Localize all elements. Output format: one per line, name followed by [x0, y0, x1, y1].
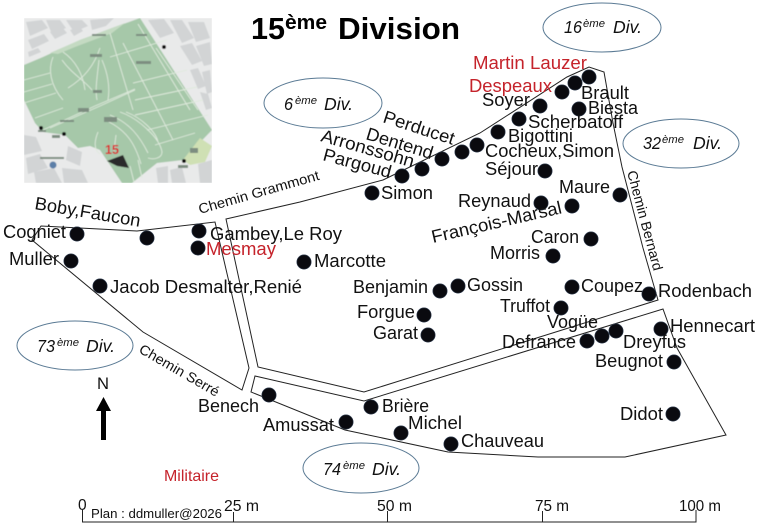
grave names: Muller [9, 249, 59, 269]
neighbouring division: 32 [623, 119, 739, 168]
neighbouring division: 32: ème [662, 134, 684, 146]
neighbouring division: 74: ème [343, 460, 365, 472]
neighbouring division: 74: Div. [372, 459, 401, 479]
grave names: Bigottini [508, 126, 573, 146]
title: Division [338, 11, 460, 46]
grave names: Brault [581, 83, 629, 103]
title: ème [285, 12, 327, 34]
north arrow [96, 374, 111, 440]
grave names: Gambey,Le Roy [210, 224, 342, 244]
path labels: Chemin Grammont [196, 167, 321, 217]
grave names: Benech [198, 396, 259, 416]
neighbouring division: 74: 74 [323, 459, 341, 479]
credit: Plan : ddmuller@2026 [91, 506, 222, 521]
path labels: Chemin Bernard [624, 169, 666, 272]
inset location map [24, 18, 212, 183]
neighbouring division: 6: ème [295, 95, 317, 107]
grave names: Jacob Desmalter,Renié [110, 277, 302, 297]
title: 15 [251, 11, 285, 46]
grave names: Martin Lauzer [473, 53, 587, 73]
grave names: Coupez [581, 276, 643, 296]
neighbouring division: 73: ème [57, 337, 79, 349]
grave names: Rodenbach [658, 281, 752, 301]
scale bar [78, 497, 721, 522]
grave names: Reynaud [458, 191, 531, 211]
neighbouring division: 16: 16 [564, 17, 582, 37]
grave names: Scherbatoff [528, 112, 624, 132]
scale bar: 50 m [377, 498, 412, 515]
grave names: François-Marsal [429, 197, 563, 247]
neighbouring division: 16 [543, 3, 661, 52]
grave markers [64, 70, 681, 451]
plot outlines of the division [32, 67, 726, 457]
grave names: Truffot [500, 296, 550, 316]
grave names: Soyer [482, 90, 530, 110]
grave names: Dentend [364, 124, 436, 163]
path labels: Chemin Serré [136, 341, 223, 400]
neighbouring division: 74 [303, 443, 419, 493]
grave names: Hennecart [670, 316, 755, 336]
grave names: Didot [620, 404, 663, 424]
scale bar: 75 m [535, 498, 569, 515]
grave names: Amussat [263, 415, 334, 435]
neighbouring division: 6 [264, 78, 382, 128]
neighbouring division: 6: 6 [284, 94, 293, 114]
scale bar: 0 [78, 497, 87, 514]
neighbouring division: 73: Div. [86, 336, 115, 356]
grave names: Morris [490, 243, 540, 263]
grave names: Boby,Faucon [33, 193, 142, 231]
grave names: Caron [531, 227, 579, 247]
neighbouring division: 16: ème [583, 18, 605, 30]
military note: Militaire [164, 468, 219, 485]
neighbouring division: 16: Div. [613, 17, 642, 37]
neighbouring division: 32: 32 [643, 133, 661, 153]
grave names: Beugnot [595, 351, 663, 371]
grave names: Maure [559, 177, 610, 197]
neighbouring division: 73 [17, 321, 133, 370]
grave names: Perducet [381, 107, 457, 149]
grave names: Pargoud [321, 145, 394, 182]
grave names: Cogniet [3, 222, 66, 242]
grave names: Chauveau [461, 431, 544, 451]
neighbouring division: 32: Div. [693, 133, 722, 153]
grave names: Simon [381, 183, 433, 203]
grave names: Biesta [588, 98, 639, 118]
grave names: Mesmay [206, 239, 276, 259]
grave names: Vogüe [547, 312, 598, 332]
grave names: Defrance [502, 332, 576, 352]
title [251, 11, 460, 46]
grave names: Garat [373, 323, 418, 343]
grave names: Forgue [357, 302, 415, 322]
grave names: Brière [382, 396, 429, 416]
north arrow: N [97, 374, 109, 393]
neighbouring division: 73: 73 [37, 336, 55, 356]
grave names: Cocheux,Simon [485, 141, 614, 161]
grave names: Séjour [485, 159, 538, 179]
grave names: Benjamin [353, 277, 428, 297]
grave names: Gossin [467, 275, 523, 295]
grave names: Arronssohn [319, 126, 417, 171]
grave names: Michel [408, 413, 462, 433]
scale bar: 25 m [224, 498, 259, 515]
path labels [136, 167, 666, 400]
grave names: Despeaux [469, 76, 552, 96]
grave names: Marcotte [314, 251, 386, 271]
neighbouring division: 6: Div. [324, 94, 353, 114]
grave names [3, 53, 755, 451]
grave names: Dreyfus [623, 332, 686, 352]
scale bar: 100 m [679, 498, 721, 515]
inset location map: 15 [105, 142, 119, 157]
